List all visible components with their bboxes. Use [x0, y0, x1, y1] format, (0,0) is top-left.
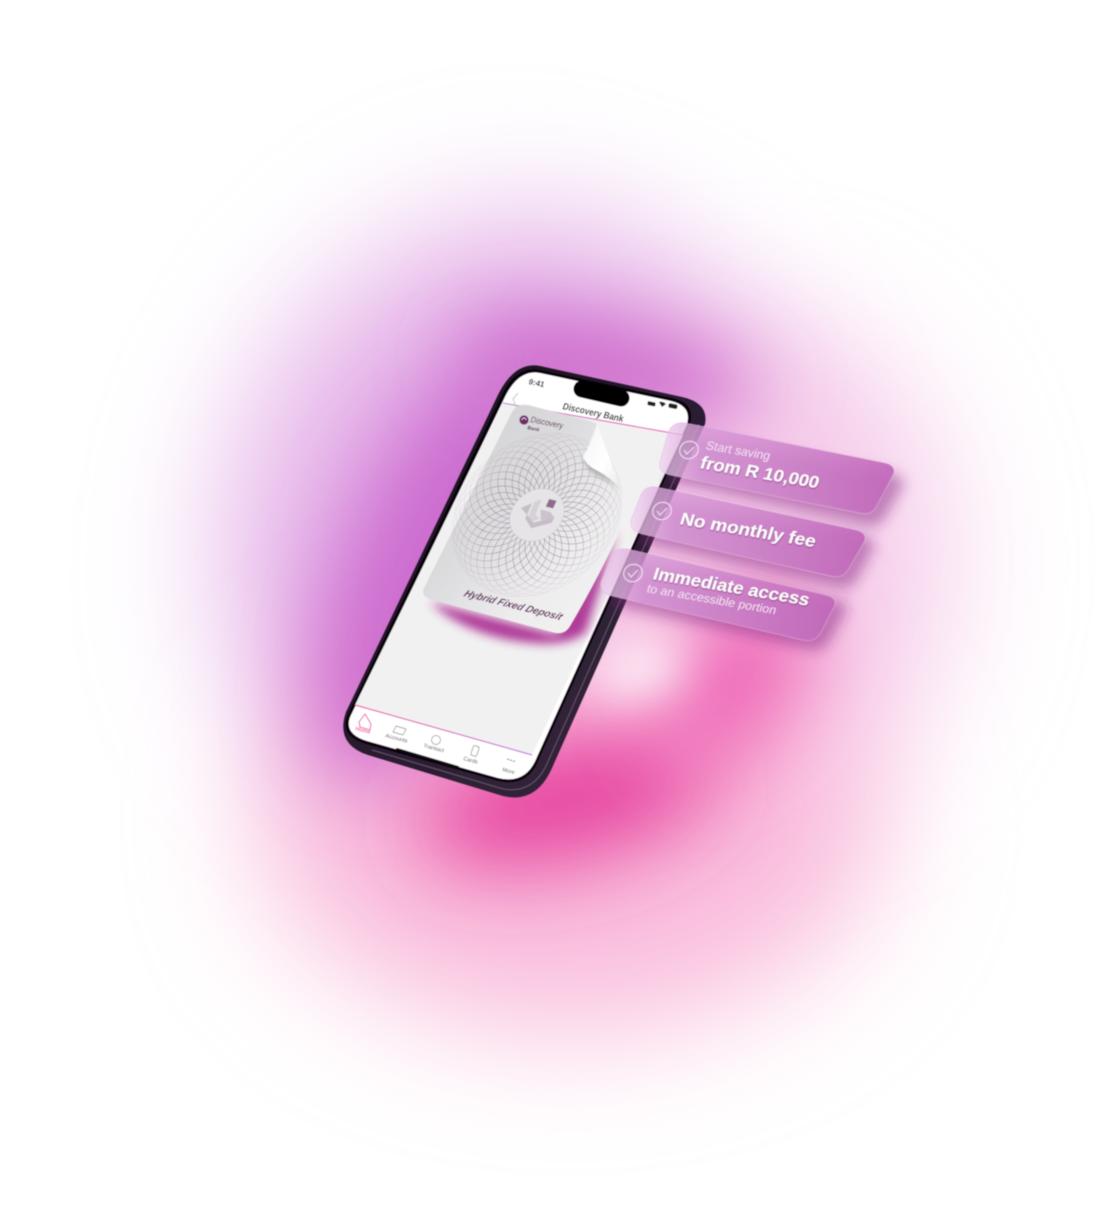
check icon	[621, 561, 645, 585]
status icons	[647, 401, 678, 409]
nav transact	[422, 736, 445, 754]
panel: immediate access: to an accessible portion	[645, 582, 778, 617]
nav accounts	[384, 726, 408, 745]
phone bezel	[345, 369, 691, 782]
phone metal body	[343, 365, 706, 797]
background glow	[133, 132, 950, 1030]
card product name: Hybrid Fixed Deposit	[461, 588, 565, 623]
card shadow	[430, 530, 618, 644]
panel: start saving: from R 10,000	[698, 453, 822, 492]
product card	[423, 404, 622, 634]
check icon	[650, 499, 674, 523]
card brand logo: Discovery	[529, 414, 565, 431]
phone screen	[349, 373, 688, 779]
panel: immediate access	[601, 549, 847, 650]
nav home	[354, 714, 371, 736]
card logo	[514, 494, 562, 532]
check icon	[677, 438, 701, 462]
card brand logo	[519, 414, 565, 433]
bottom navigation	[354, 714, 515, 776]
bottom nav line	[355, 705, 532, 755]
phone edge highlight	[372, 424, 699, 790]
app header title: Discovery Bank	[561, 401, 626, 425]
nav cards	[462, 745, 479, 766]
top app bar line	[503, 403, 683, 435]
nav home: Home	[354, 726, 371, 736]
panel text: Start saving	[704, 439, 772, 463]
status time: 9:41	[527, 377, 546, 389]
card page curl shadow	[583, 458, 620, 488]
panel text: Immediate access	[651, 564, 812, 610]
nav accounts: Accounts	[384, 733, 408, 745]
nav more	[501, 759, 515, 776]
feature panels	[601, 423, 904, 650]
screen content area	[355, 403, 683, 755]
card guilloche rosette	[453, 434, 621, 596]
nav more: More	[501, 767, 515, 776]
dynamic island	[582, 389, 621, 398]
nav transact: Transact	[422, 743, 445, 754]
back chevron	[513, 393, 518, 407]
phone	[343, 365, 706, 797]
nav cards: Cards	[462, 756, 479, 766]
panel text: No monthly fee	[678, 509, 819, 551]
panel: no monthly fee	[631, 487, 874, 588]
home indicator	[397, 749, 458, 767]
card brand logo: Bank	[526, 425, 540, 433]
card page curl	[583, 424, 620, 487]
panel: start saving	[659, 423, 904, 526]
